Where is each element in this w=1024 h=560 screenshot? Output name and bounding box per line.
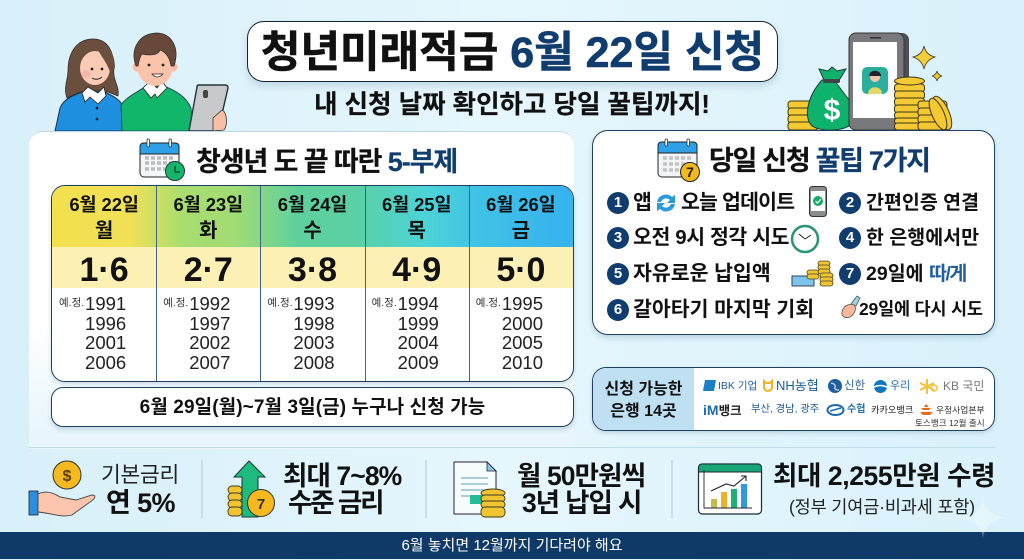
icon: document and coins <box>454 461 506 518</box>
column: June 25: 2004 <box>398 332 439 353</box>
column: June 25 <box>365 186 470 381</box>
column: June 23: 화 <box>199 220 217 242</box>
column: June 26: 금 <box>512 220 530 242</box>
stat: max rate <box>228 460 402 518</box>
bank logos <box>703 378 985 428</box>
label: 14 banks <box>593 368 694 430</box>
icon: bankbook and coins <box>792 260 834 286</box>
bank logos: 토스뱅크 12월 출시 <box>915 418 985 428</box>
tip: retry on the 29th: 29일에 다시 시도 <box>859 299 983 319</box>
tip 5: 5 <box>614 265 622 282</box>
bank logos: iM뱅크 <box>703 402 742 418</box>
column: June 24: 2003 <box>293 332 335 353</box>
tip 4: 한 은행에서만 <box>866 227 979 249</box>
icon: tapping hand <box>841 296 860 318</box>
tip 6: 6 <box>614 301 622 318</box>
tip 7: 29일에 따/게 <box>866 263 966 285</box>
icon: refresh <box>657 194 675 212</box>
icon: arrow and coins: 7 <box>257 496 265 513</box>
bank logos: KB 국민 <box>943 379 984 393</box>
column: June 26: 5·0 <box>496 251 545 289</box>
bank logos: 수협 <box>847 404 865 415</box>
column: June 26: 예.정. <box>476 297 501 309</box>
text: level rate: 수준 금리 <box>288 488 382 518</box>
bank logos: 카카오뱅크 <box>871 405 913 415</box>
illustration: two young people with tablet <box>54 32 229 131</box>
column: June 26: 2000 <box>502 312 543 334</box>
tip 1: 1 <box>614 194 622 211</box>
title: 청년미래적금 6월 22일 신청 <box>261 29 764 77</box>
text: base rate label: 기본금리 <box>101 463 179 487</box>
column: June 24: 1993 <box>293 293 335 314</box>
column: June 22: 예.정. <box>59 297 84 309</box>
stat: base interest <box>28 460 179 518</box>
tip 7: 7 <box>846 265 854 282</box>
heading: schedule: 창생년 도 끝 따란 5-부제 <box>196 147 457 177</box>
bank logos: 부산, 경남, 광주 <box>751 404 819 415</box>
column: June 24: 6월 24일 <box>278 194 347 215</box>
icon: clock <box>790 224 820 254</box>
column: June 23: 1992 <box>189 293 230 314</box>
column: June 22: 월 <box>95 220 113 242</box>
column: June 22 <box>52 186 157 381</box>
tip 3: 3 <box>614 229 622 246</box>
stat: maximum payout <box>698 461 995 517</box>
icon: phone with check <box>809 186 827 217</box>
tip 3: 오전 9시 정각 시도 <box>633 226 789 249</box>
icon: calendar with 7 <box>658 138 700 182</box>
column: June 26: 1995 <box>502 293 543 314</box>
illustration: phone with money bag and coins <box>788 32 952 130</box>
icon: calendar with clock <box>140 138 185 181</box>
column: June 23: 1997 <box>189 312 230 334</box>
column: June 23: 예.정. <box>163 297 188 309</box>
callout: open to everyone: 6월 29일(월)~7월 3일(금) 누구나 신청 가능 <box>140 397 485 418</box>
column: June 25: 6월 25일 <box>382 194 451 215</box>
tip 4: 4 <box>846 229 854 246</box>
column: June 22: 1991 <box>85 293 126 314</box>
column: June 26: 2010 <box>502 352 543 372</box>
column: June 26 <box>476 194 556 372</box>
tip 1: 오늘 업데이트 <box>681 191 794 214</box>
column: June 22: 2006 <box>85 352 126 372</box>
tip 5: 자유로운 납입액 <box>633 262 771 285</box>
label: 14 banks: 신청 가능한 <box>604 381 683 398</box>
column: June 26: 6월 26일 <box>486 194 556 215</box>
bank logos: IBK 기업 <box>718 380 757 392</box>
icon: hand with coin: $ <box>63 468 72 485</box>
column: June 22: 1·6 <box>80 251 129 289</box>
tip 1: 앱 <box>633 191 652 214</box>
panel: 7 tips <box>592 130 995 335</box>
text: 500 thousand won monthly: 월 50만원씩 <box>517 461 645 491</box>
column: June 23: 2·7 <box>184 251 233 289</box>
bank logos: NH농협 <box>776 378 819 393</box>
column: June 24: 수 <box>303 220 322 242</box>
illustration: phone with money bag and coins: $ <box>824 94 841 127</box>
column: June 24 <box>260 186 366 381</box>
column: June 25: 1999 <box>398 312 439 334</box>
footer banner <box>0 532 1024 559</box>
text: 5 percent: 연 5% <box>106 488 175 518</box>
icon: hand with coin <box>28 460 96 516</box>
icon: arrow and coins <box>228 460 275 518</box>
callout: open to everyone <box>51 387 574 427</box>
bank logos: 우리 <box>890 380 910 392</box>
column: June 26: 2005 <box>502 332 543 353</box>
column: June 25: 4·9 <box>392 251 441 289</box>
tip 2: 2 <box>846 194 854 211</box>
icon: calendar with 7: 7 <box>686 164 694 180</box>
column: June 23: 6월 23일 <box>174 194 243 215</box>
column: June 24: 2008 <box>293 352 335 372</box>
heading: tips: 당일 신청 꿀팁 7가지 <box>709 146 930 176</box>
bank logos: 우정사업본부 <box>936 405 985 415</box>
label: 14 banks: 은행 14곳 <box>610 403 677 420</box>
divider <box>29 447 995 448</box>
column: June 24: 1998 <box>293 312 335 334</box>
text: max 22.55 million won: 최대 2,255만원 수령 <box>773 461 995 491</box>
tip 2: 간편인증 연결 <box>866 192 979 214</box>
footer banner: 6월 놓치면 12월까지 기다려야 해요 <box>401 537 623 554</box>
column: June 25: 1994 <box>398 293 439 314</box>
column: June 23: 2002 <box>189 332 230 353</box>
tip 6: 갈아타기 마지막 기회 <box>633 298 814 321</box>
bank logos: 신한 <box>844 380 865 392</box>
tip 1 <box>607 191 794 214</box>
column: June 24: 3·8 <box>288 251 337 289</box>
column: June 22: 2001 <box>85 332 126 353</box>
table: rotation by birth year <box>51 185 574 382</box>
column: June 22: 1996 <box>85 312 126 334</box>
panel: participating banks <box>592 367 995 431</box>
column: June 23 <box>156 186 261 381</box>
column: June 25: 예.정. <box>372 297 397 309</box>
text: includes government contribution: (정부 기여금·비과세 포함) <box>789 497 975 517</box>
sparkle <box>966 500 1002 538</box>
column: June 25: 목 <box>407 220 426 242</box>
text: 7 to 8 percent: 최대 7~8% <box>283 461 401 491</box>
subtitle: 내 신청 날짜 확인하고 당일 꿀팁까지! <box>314 91 710 119</box>
column: June 24: 예.정. <box>267 297 293 309</box>
column: June 22: 6월 22일 <box>69 194 139 215</box>
column: June 25: 2009 <box>398 352 439 372</box>
icon: growth chart <box>698 463 762 515</box>
text: 3 years: 3년 납입 시 <box>522 488 641 518</box>
stat: monthly deposit <box>454 461 645 518</box>
panel: 5-day rotation schedule <box>29 131 574 449</box>
column: June 23: 2007 <box>189 352 230 372</box>
